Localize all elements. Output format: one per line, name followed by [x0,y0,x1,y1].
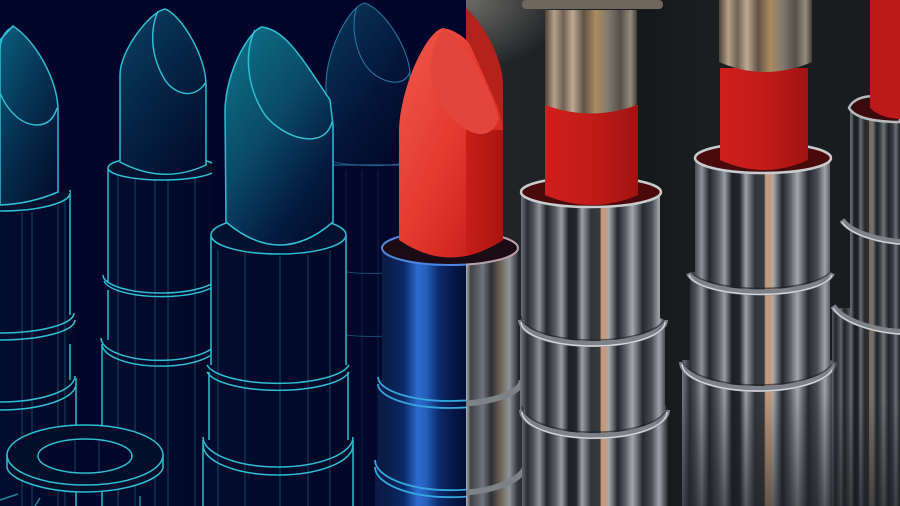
body [520,192,668,506]
cap [719,0,812,72]
flange [522,0,663,9]
lipstick outline: back right [326,3,410,506]
body: silver half [466,252,522,506]
cut face [431,28,499,134]
rim [695,143,831,173]
rings: blue half [374,377,466,498]
lipstick: photo right [682,0,834,506]
rings: silver half [466,380,522,496]
bullet: red [720,68,808,170]
rings [842,220,900,242]
rim [849,96,900,122]
panel: photo background [466,0,900,506]
collar [382,231,518,265]
lipstick: main red with split body [375,28,526,506]
lipstick: back red sliver [466,8,503,150]
lipstick: photo middle [520,0,668,506]
rings [689,273,832,292]
lipstick: photo far right [832,0,900,506]
body [682,158,834,506]
body [832,108,900,506]
ring: outline washer [0,425,163,506]
body: blue half [375,252,466,506]
bullet: red [870,0,900,119]
lipstick outline: far left [0,26,76,506]
cap [545,10,637,114]
bullet: red [399,28,503,258]
rings [521,320,665,344]
bullet: red [545,105,638,205]
lipstick outline: second [101,9,219,506]
rim [521,177,661,207]
lipstick outline: center large [202,27,353,506]
panel: blueprint background [0,0,466,506]
